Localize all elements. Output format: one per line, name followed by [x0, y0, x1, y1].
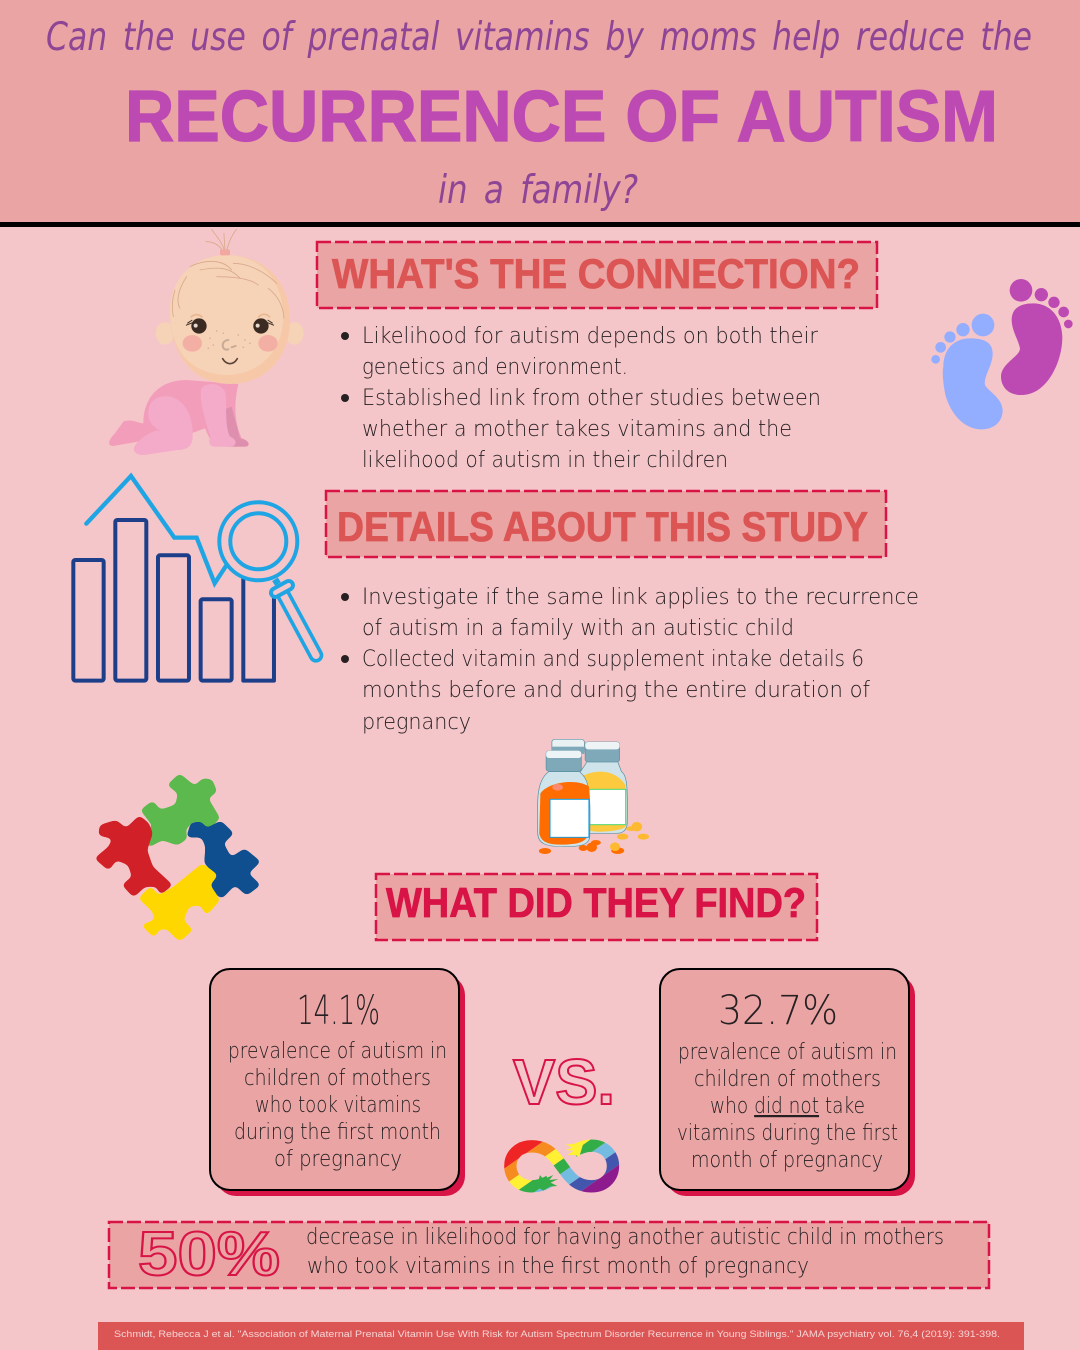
callout: 50% decrease — [109, 1220, 989, 1289]
icon: baby footprints — [931, 279, 1073, 429]
baby face — [191, 318, 207, 334]
baby hair — [172, 229, 284, 318]
trend line — [86, 476, 226, 583]
heading: details about this study: DETAILS ABOUT THIS STUDY — [337, 503, 868, 550]
icon: bar chart with magnifying glass — [73, 476, 316, 681]
blue footprint — [931, 314, 1003, 429]
title main: RECURRENCE OF AUTISM — [125, 77, 998, 157]
green piece — [140, 773, 220, 847]
magnifier — [219, 502, 316, 655]
stat card: 14.1%: children of mothers — [244, 1066, 431, 1091]
yellow piece — [139, 863, 220, 942]
stat card: 14.1%: of pregnancy — [274, 1147, 402, 1172]
back bottle — [552, 739, 584, 753]
stat card: 14.1%: prevalence of autism in — [228, 1039, 447, 1064]
stat card: 14.1%: who took vitamins — [255, 1093, 421, 1118]
heading: details about this study — [326, 491, 886, 557]
bars — [73, 520, 274, 681]
baby body — [109, 380, 249, 455]
stat card: 32.7% — [660, 969, 915, 1196]
heading: what did they find: WHAT DID THEY FIND? — [386, 879, 806, 926]
callout text: decrease in likelihood for having another autistic child in mothers — [306, 1225, 944, 1250]
text block: connection bullets: genetics and environment. — [362, 355, 628, 380]
text block: connection bullets — [341, 324, 821, 473]
text block: connection bullets: likelihood of autism in their children — [362, 448, 728, 473]
stat card: 32.7%: prevalence of autism in — [678, 1040, 897, 1065]
text block: connection bullets: Likelihood for autism depends on both their — [362, 324, 819, 349]
icon: vitamin bottles — [537, 739, 649, 854]
vs label: VS. — [513, 1046, 615, 1118]
right bottle — [579, 762, 627, 833]
text block: study bullets: Collected vitamin and supplement intake details 6 — [362, 647, 864, 672]
baby head — [156, 322, 174, 345]
stat card: 32.7%: 32.7% — [718, 988, 838, 1034]
left hand — [537, 1175, 558, 1191]
icon: crawling baby — [109, 229, 304, 455]
heading: what did they find — [376, 874, 817, 940]
stat card: 32.7%: vitamins during the first — [677, 1121, 898, 1146]
blue piece — [186, 821, 261, 899]
text block: connection bullets: Established link from other studies between — [362, 386, 821, 411]
purple footprint — [1001, 279, 1073, 395]
icon: puzzle heart — [95, 773, 261, 942]
header banner — [0, 0, 1080, 227]
rainbow loop — [504, 1140, 620, 1192]
stat card: 32.7%: children of mothers — [694, 1067, 881, 1092]
stat card: 32.7%: month of pregnancy — [691, 1148, 883, 1173]
stat card: 14.1%: during the first month — [234, 1120, 441, 1145]
heading: what's the connection — [317, 242, 877, 308]
front bottle — [537, 772, 590, 847]
stat card: 32.7%: who did not take — [710, 1094, 865, 1119]
callout: 50% decrease: who took vitamins in the first month of pregnancy — [307, 1254, 809, 1279]
icon: rainbow infinity — [504, 1140, 620, 1192]
big number: 50% — [138, 1220, 280, 1289]
text block: study bullets — [341, 585, 919, 735]
text block: study bullets: of autism in a family with an autistic child — [362, 616, 794, 641]
stat card: 14.1%: 14.1% — [297, 988, 380, 1034]
text block: study bullets: pregnancy — [362, 710, 471, 735]
right hand — [565, 1143, 583, 1157]
text block: connection bullets: whether a mother takes vitamins and the — [362, 417, 792, 442]
loose pills — [539, 840, 624, 854]
title line 3: in a family? — [438, 168, 638, 213]
text block: study bullets: months before and during the entire duration of — [362, 678, 870, 703]
footer citation — [98, 1322, 1024, 1350]
footer citation: Schmidt, Rebecca J et al. "Association of Maternal Prenatal Vitamin Use With Risk for Autism Spectrum Disorder Recurrence in Young Siblings." JAMA psychiatry vol. 76,4 (2019): 391-398. — [114, 1329, 1000, 1340]
red piece — [95, 815, 173, 897]
stat card: 14.1% — [210, 969, 465, 1196]
heading: what's the connection: WHAT'S THE CONNECTION? — [332, 250, 860, 297]
text block: study bullets: Investigate if the same link applies to the recurrence — [362, 585, 919, 610]
